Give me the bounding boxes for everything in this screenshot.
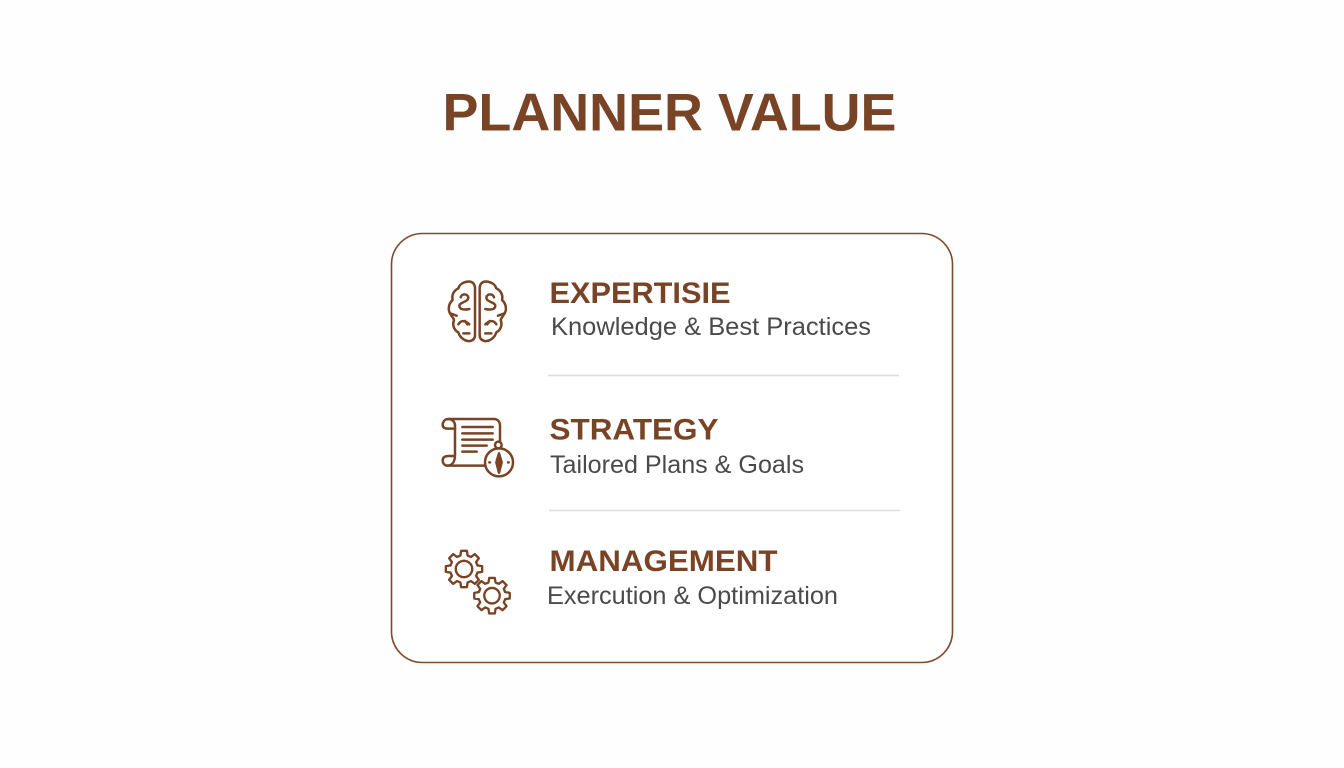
row: management: [446, 545, 838, 613]
row: strategy: [443, 414, 804, 479]
heading: expertisie: EXPERTISIE: [550, 277, 730, 310]
icon: gears: [446, 551, 510, 613]
icon: brain: [449, 282, 506, 341]
title: PLANNER VALUE: [442, 84, 896, 142]
icon: scroll and compass: [443, 419, 513, 476]
row: expertise: [449, 277, 871, 341]
text: exercution and optimization: Exercution & Optimization: [547, 582, 838, 610]
heading: management: MANAGEMENT: [550, 545, 778, 578]
panel: planner value card: [392, 234, 952, 662]
heading: strategy: STRATEGY: [550, 414, 718, 446]
text: knowledge and best practices: Knowledge & Best Practices: [551, 313, 871, 341]
text: tailored plans and goals: Tailored Plans & Goals: [550, 451, 804, 479]
